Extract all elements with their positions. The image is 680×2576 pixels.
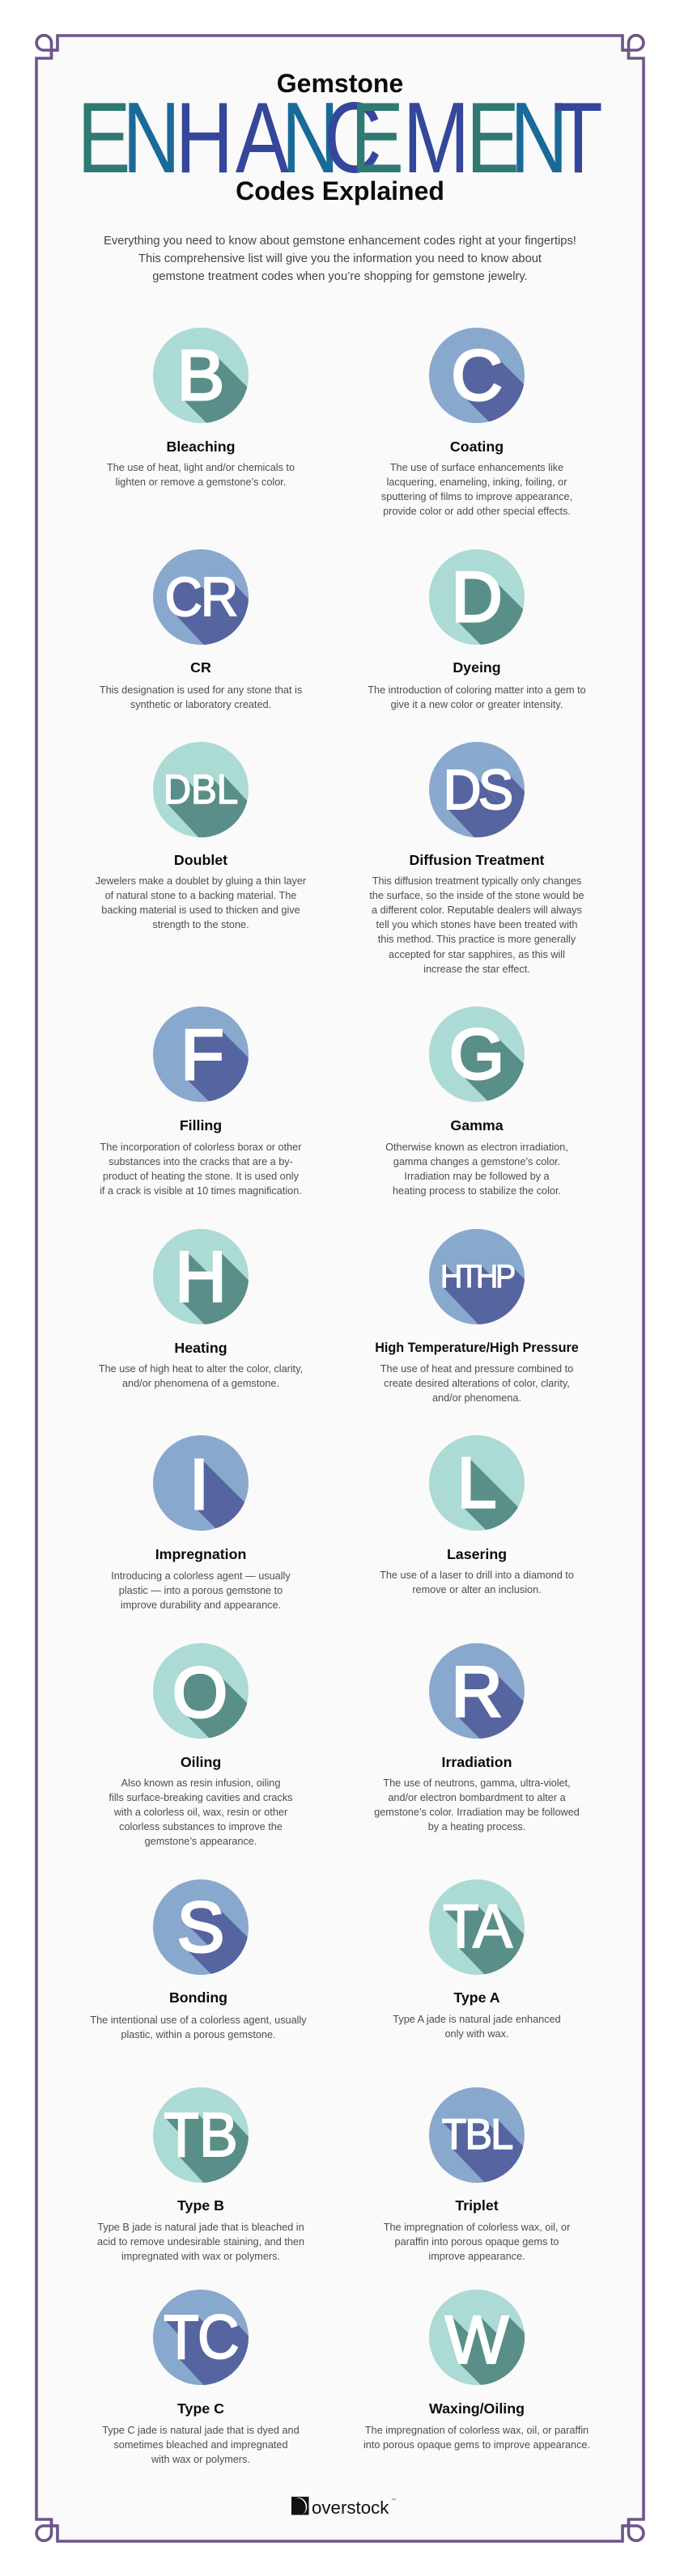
description: Type A: only with wax. (445, 2028, 508, 2040)
description: Irradiation (374, 1777, 580, 1832)
description: Bleaching: lighten or remove a gemstone’s color. (116, 477, 286, 488)
description: Waxing/Oiling (347, 2422, 606, 2452)
logo: overstock: overstock (312, 2498, 389, 2518)
icon: C: C (451, 335, 503, 415)
icon: O: O (172, 1652, 227, 1732)
title: Codes Explained: Codes Explained (236, 176, 444, 205)
heading: Dyeing: Dyeing (453, 659, 501, 676)
description: CR: This designation is used for any stone that is (100, 684, 302, 696)
icon: D (429, 549, 525, 645)
card: Type C (102, 2290, 300, 2465)
description: Type C: Type C jade is natural jade that is dyed and (102, 2424, 300, 2435)
description: Heating: The use of high heat to alter the color, clarity, (99, 1362, 303, 1374)
description: Oiling: gemstone’s appearance. (145, 1836, 257, 1847)
description: Doublet: of natural stone to a backing material. The (105, 890, 296, 901)
logo: overstock (290, 2495, 398, 2518)
icon: TB: TB (164, 2100, 238, 2170)
card: Bonding (90, 1879, 307, 2040)
heading: Coating: Coating (450, 439, 504, 455)
description: Bleaching: The use of heat, light and/or chemicals to (107, 461, 295, 472)
description: Type B (97, 2222, 304, 2262)
icon: S: S (177, 1887, 224, 1967)
heading: Gamma: Gamma (450, 1117, 504, 1133)
card: Waxing/Oiling (347, 2290, 606, 2452)
heading: Bleaching: Bleaching (167, 439, 235, 455)
icon: W (429, 2290, 525, 2385)
description: Filling: product of heating the stone. It is used only (103, 1171, 299, 1182)
description: Type B: impregnated with wax or polymers. (121, 2251, 280, 2262)
description: CR (100, 684, 302, 710)
description: Triplet: The impregnation of colorless wax, oil, or (384, 2222, 570, 2233)
description: Type C: with wax or polymers. (151, 2454, 250, 2465)
icon: D: D (451, 557, 503, 637)
card: Gamma (385, 1006, 568, 1197)
description: Irradiation: and/or electron bombardment to alter a (388, 1792, 566, 1803)
description: Lasering: The use of a laser to drill into a diamond to (380, 1570, 574, 1581)
description: Bonding: The intentional use of a colorless agent, usually (90, 2015, 307, 2026)
description: Coating (381, 461, 572, 517)
card: Diffusion Treatment (369, 742, 584, 975)
card: Doublet (96, 742, 306, 930)
card: Lasering (380, 1435, 574, 1595)
description: Lasering: remove or alter an inclusion. (412, 1584, 542, 1595)
description: Coating: provide color or add other special effects. (383, 506, 571, 517)
heading: Impregnation: Impregnation (155, 1546, 246, 1562)
description: Impregnation (111, 1570, 291, 1611)
heading: High Temperature/High Pressure: High Temperature/High Pressure (375, 1341, 579, 1355)
icon: C (429, 328, 525, 423)
card: Dyeing (368, 549, 586, 710)
icon: H (153, 1229, 249, 1324)
description: Gamma: heating process to stabilize the color. (393, 1185, 561, 1197)
description: Waxing/Oiling: The impregnation of colorless wax, oil, or paraffin (365, 2424, 589, 2435)
logo: overstock: ™ (391, 2498, 396, 2503)
description: Oiling: with a colorless oil, wax, resin or other (114, 1807, 287, 1818)
description: Coating: sputtering of films to improve appearance, (381, 491, 572, 502)
description: Type C (102, 2424, 300, 2465)
description: Filling: if a crack is visible at 10 times magnification. (100, 1185, 302, 1197)
card: Impregnation (111, 1435, 291, 1611)
description: Dyeing: give it a new color or greater intensity. (391, 699, 563, 710)
heading: Triplet: Triplet (455, 2197, 499, 2214)
icon: CR (153, 549, 249, 645)
heading: Heating: Heating (174, 1340, 227, 1356)
card: Irradiation (374, 1643, 580, 1832)
description: Doublet: strength to the stone. (152, 919, 249, 930)
card: Coating (381, 328, 572, 517)
heading: Diffusion Treatment: Diffusion Treatment (410, 852, 544, 868)
heading: Type A: Type A (453, 1989, 500, 2006)
description: Oiling: colorless substances to improve the (119, 1821, 283, 1832)
description: Waxing/Oiling: into porous opaque gems to improve appearance. (363, 2439, 590, 2451)
description: Doublet (96, 875, 306, 930)
icon: B: B (177, 335, 224, 415)
card: Bleaching (107, 328, 295, 488)
icon: L (429, 1435, 525, 1531)
icon: G (429, 1006, 525, 1102)
icon: TA: TA (443, 1892, 511, 1961)
heading: Waxing/Oiling: Waxing/Oiling (429, 2400, 525, 2417)
icon: B (153, 328, 249, 423)
description: Bleaching (107, 461, 295, 488)
description: Oiling (108, 1777, 293, 1847)
heading: Oiling: Oiling (181, 1754, 221, 1770)
icon: S (153, 1879, 249, 1975)
icon: W: W (444, 2302, 509, 2378)
description: Diffusion Treatment: increase the star effect. (423, 964, 530, 975)
icon: O (153, 1643, 249, 1739)
description: Irradiation: The use of neutrons, gamma, ultra-violet, (383, 1777, 571, 1788)
icon: DS: DS (443, 758, 511, 821)
description: Heating: and/or phenomena of a gemstone. (122, 1378, 279, 1389)
icon: TB (153, 2087, 249, 2183)
description: High Temperature/High Pressure (380, 1362, 573, 1404)
description: Triplet (384, 2222, 570, 2262)
description: Filling: substances into the cracks that are a by- (108, 1156, 293, 1167)
icon: L: L (457, 1443, 496, 1523)
description: Dyeing (368, 684, 586, 710)
description: Impregnation: improve durability and appearance. (121, 1599, 281, 1611)
icon: DBL (153, 742, 249, 837)
description: Diffusion Treatment: tell you which stones have been treated with (376, 919, 577, 930)
icon: HTHP: HTHP (440, 1259, 513, 1294)
description: Type A (393, 2013, 561, 2040)
description: CR: synthetic or laboratory created. (130, 699, 271, 710)
card: Filling (100, 1006, 302, 1197)
description: Irradiation: gemstone’s color. Irradiation may be followed (374, 1807, 580, 1818)
icon: F (153, 1006, 249, 1102)
heading: Type B: Type B (177, 2197, 224, 2214)
icon: CR: CR (165, 566, 236, 628)
heading: Lasering: Lasering (447, 1546, 507, 1562)
description: Doublet: Jewelers make a doublet by gluing a thin layer (96, 875, 306, 887)
intro text: Everything you need to know about gemstone enhancement codes right at your fingertips! (104, 235, 576, 248)
heading: Filling: Filling (180, 1117, 222, 1133)
description: Gamma: Otherwise known as electron irradiation, (385, 1141, 568, 1152)
description: Heating (99, 1362, 303, 1389)
description: Gamma: gamma changes a gemstone’s color. (393, 1156, 560, 1167)
description: Lasering (380, 1570, 574, 1595)
description: Type B: acid to remove undesirable staining, and then (97, 2236, 304, 2248)
description: Type C: sometimes bleached and impregnated (113, 2439, 288, 2451)
description: Doublet: backing material is used to thicken and give (101, 905, 300, 916)
heading: CR: CR (190, 659, 211, 676)
description: Bonding (90, 2015, 307, 2040)
icon: DS (429, 742, 525, 837)
icon: H: H (175, 1236, 227, 1316)
card: Type A (393, 1879, 561, 2040)
icon: I (153, 1435, 249, 1531)
description: High Temperature/High Pressure: create desired alterations of color, clarity, (384, 1378, 570, 1389)
description: Diffusion Treatment: a different color. Reputable dealers will always (372, 905, 582, 916)
description: Diffusion Treatment: This diffusion treatment typically only changes (372, 875, 581, 887)
card: Heating (99, 1229, 303, 1389)
card: CR (100, 549, 302, 710)
icon: TC (153, 2290, 249, 2385)
description: Impregnation: plastic — into a porous gemstone to (119, 1585, 283, 1596)
icon: R: R (451, 1651, 503, 1731)
heading: Doublet: Doublet (174, 852, 227, 868)
description: Dyeing: The introduction of coloring matter into a gem to (368, 684, 586, 696)
icon: TA (429, 1879, 525, 1975)
description: Bonding: plastic, within a porous gemstone. (121, 2029, 276, 2040)
description: Diffusion Treatment: the surface, so the inside of the stone would be (369, 890, 584, 901)
title: Gemstone: Gemstone (277, 69, 403, 98)
heading: Irradiation: Irradiation (442, 1754, 512, 1770)
description: Diffusion Treatment: this method. This practice is more generally (378, 934, 576, 945)
description: Filling (100, 1141, 302, 1197)
description: Oiling: Also known as resin infusion, oiling (121, 1777, 280, 1788)
icon: R (429, 1643, 525, 1739)
description: Diffusion Treatment (369, 875, 584, 975)
card: Type B (97, 2087, 304, 2262)
description: Gamma (385, 1141, 568, 1197)
description: Gamma: Irradiation may be followed by a (404, 1171, 550, 1182)
icon: TC: TC (164, 2303, 238, 2372)
description: High Temperature/High Pressure: The use of heat and pressure combined to (380, 1362, 573, 1374)
icon: TBL (429, 2087, 525, 2183)
description: Filling: The incorporation of colorless borax or other (100, 1141, 301, 1152)
description: Triplet: improve appearance. (428, 2251, 525, 2262)
description: Oiling: fills surface-breaking cavities and cracks (108, 1792, 293, 1803)
intro text (104, 235, 576, 283)
intro text: This comprehensive list will give you the information you need to know about (138, 252, 542, 265)
heading: Bonding: Bonding (169, 1989, 227, 2006)
card: High Temperature/High Pressure (375, 1229, 579, 1404)
description: Diffusion Treatment: accepted for star sapphires, as this will (389, 949, 565, 960)
heading: Type C: Type C (177, 2400, 224, 2417)
icon: F: F (181, 1015, 224, 1095)
icon: TBL: TBL (442, 2111, 512, 2159)
description: Type A: Type A jade is natural jade enhanced (393, 2013, 561, 2024)
description: Coating: lacquering, enameling, inking, foiling, or (387, 477, 567, 488)
description: Coating: The use of surface enhancements like (390, 461, 563, 472)
intro text: gemstone treatment codes when you’re shopping for gemstone jewelry. (152, 270, 528, 283)
icon: I: I (189, 1444, 209, 1524)
description: Irradiation: by a heating process. (428, 1821, 525, 1832)
icon: G: G (449, 1014, 504, 1094)
card: Oiling (108, 1643, 293, 1847)
card: Triplet (384, 2087, 570, 2262)
icon: HTHP (429, 1229, 525, 1324)
description: High Temperature/High Pressure: and/or phenomena. (432, 1392, 521, 1404)
description: Triplet: paraffin into porous opaque gems to (395, 2236, 559, 2248)
description: Type B: Type B jade is natural jade that is bleached in (97, 2222, 304, 2233)
description: Impregnation: Introducing a colorless agent — usually (111, 1570, 291, 1581)
icon: DBL: DBL (164, 766, 238, 812)
